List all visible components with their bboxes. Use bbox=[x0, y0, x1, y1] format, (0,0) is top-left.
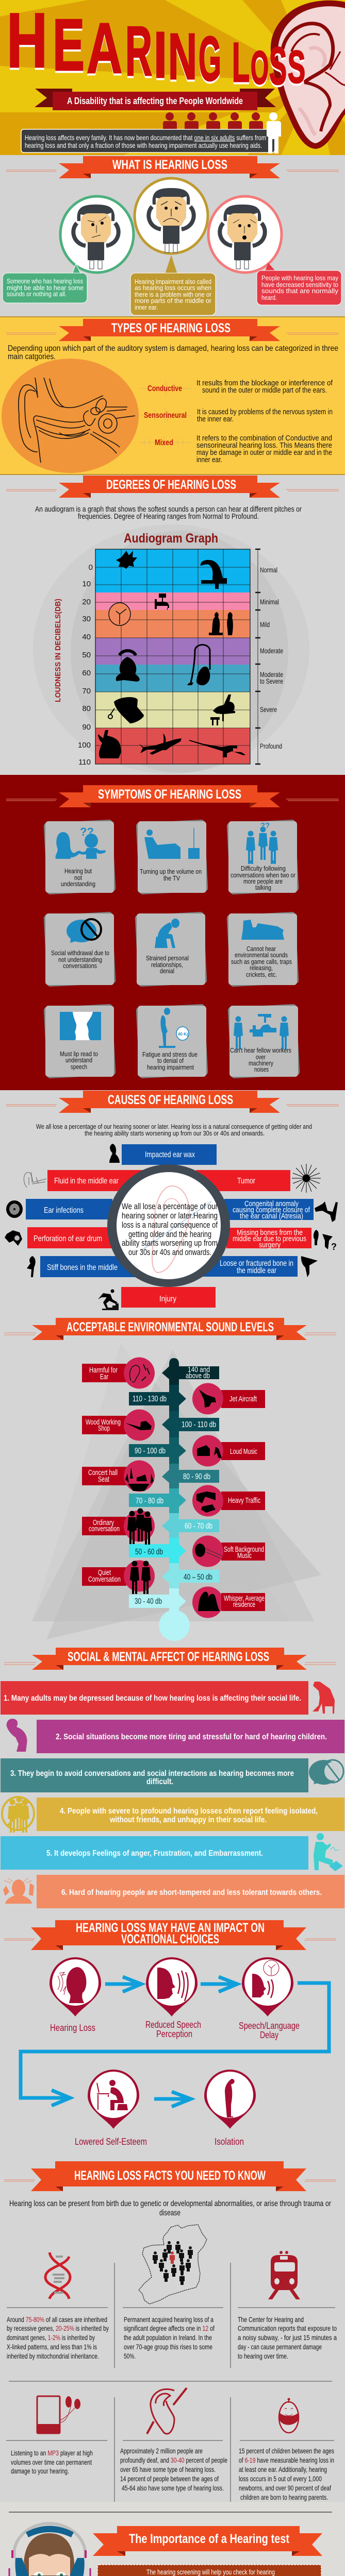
axis: decibel values: 60 bbox=[82, 669, 91, 677]
level tags: decibel ranges: 80 - 90 db bbox=[183, 1472, 210, 1481]
box: fluid: Fluid in the middle ear bbox=[54, 1177, 119, 1185]
icon: dna bbox=[45, 2252, 70, 2299]
callout: gold: Hearing Impairment also called bbox=[135, 278, 211, 285]
box: injury bbox=[121, 1287, 216, 1308]
chart: sound level spine bbox=[159, 1358, 190, 1641]
item: soft background music bbox=[192, 1535, 265, 1567]
label: mixed: Mixed bbox=[155, 438, 173, 447]
text: fact deaf: profoundly deaf, and 30-40 percent of people bbox=[120, 2456, 227, 2464]
title: S bbox=[269, 37, 287, 95]
subtitle ribbon: A Disability that is affecting the People Worldwide bbox=[67, 96, 243, 106]
card: social withdrawal: Social withdrawal due to bbox=[51, 949, 109, 957]
chart icons: sounds bbox=[98, 551, 245, 758]
card: fatigue and stress: to denial of bbox=[157, 1057, 184, 1064]
axis: decibel values: 110 bbox=[78, 758, 91, 767]
heading: symptoms of hearing loss bbox=[6, 785, 339, 807]
item: ordinary conversation: conversation bbox=[89, 1524, 120, 1533]
heading: facts bbox=[4, 2161, 336, 2191]
flow arrow 4 bbox=[154, 2092, 191, 2107]
flow step: speech language delay: Speech/Language bbox=[239, 2021, 300, 2031]
icon: no friends bbox=[2, 1797, 34, 1833]
scale: degree labels: Moderate bbox=[260, 647, 283, 655]
card: hearing but not understanding: ?? bbox=[80, 825, 94, 838]
box: missing bones: middle ear due to previous bbox=[233, 1234, 306, 1243]
flow step: reduced speech perception bbox=[145, 1957, 201, 2039]
subtitle ribbon bbox=[35, 89, 276, 110]
bar: point 4: without friends, and unhappy in their social life. bbox=[109, 1816, 267, 1824]
card: difficulty following conversations: Difficulty following bbox=[241, 865, 286, 872]
axis: decibel values: 50 bbox=[82, 651, 91, 659]
title: A bbox=[87, 9, 122, 88]
card: fatigue and stress: Fatigue and stress due bbox=[142, 1050, 198, 1058]
item: wood working shop: Shop bbox=[98, 1424, 110, 1433]
text: fact subway: The Center for Hearing and bbox=[238, 2315, 304, 2324]
item: harmful for ear bbox=[82, 1357, 155, 1389]
flow step: lowered self-esteem: Lowered Self-Esteem bbox=[75, 2137, 147, 2147]
callout: red: heard. bbox=[261, 294, 277, 301]
axis: decibel values: 10 bbox=[82, 580, 91, 588]
item: harmful for ear: Harmful for bbox=[89, 1366, 118, 1375]
icon: seated depressed person bbox=[313, 1682, 335, 1714]
flow arrow 1 bbox=[105, 1977, 141, 1992]
level tags: decibel ranges: 30 - 40 db bbox=[135, 1597, 162, 1606]
box: impacted ear wax: Impacted ear wax bbox=[145, 1150, 195, 1159]
card: difficulty following conversations: conversations when two or bbox=[231, 871, 296, 879]
box: loose bone: Loose or fractured bone in bbox=[220, 1259, 293, 1268]
card: fellow workers: machinery bbox=[249, 1059, 273, 1067]
icon: white person bbox=[267, 112, 281, 154]
text: degrees intro: frequencies. Degree of Hearing ranges from Normal to Profound. bbox=[78, 512, 259, 521]
axis: decibel values: 20 bbox=[82, 598, 91, 606]
panel: hearing screening: The hearing screening will help you check for hearing bbox=[146, 2568, 275, 2576]
text: fact ireland: significant degree affects one in 12 of bbox=[124, 2324, 215, 2332]
icon: ear anatomy bbox=[2, 359, 139, 473]
item: harmful for ear: Ear bbox=[100, 1372, 108, 1381]
card: difficulty following conversations: ?? bbox=[260, 821, 270, 830]
box: ear infections: Ear infections bbox=[44, 1206, 84, 1215]
divider bbox=[9, 2512, 332, 2513]
panel: header background bbox=[0, 0, 345, 155]
card: fatigue and stress: 40 Kg bbox=[178, 1032, 189, 1037]
level tags: decibel ranges: 100 - 110 db bbox=[182, 1420, 216, 1429]
text: causes intro bbox=[36, 1123, 312, 1137]
callout: green bbox=[3, 264, 87, 303]
box: missing bones bbox=[226, 1228, 311, 1249]
heading: social and mental affect bbox=[4, 1648, 336, 1670]
item: heavy traffic bbox=[192, 1485, 265, 1517]
card: social withdrawal: not understanding bbox=[58, 956, 102, 963]
callout: green: might be able to hear some bbox=[7, 284, 84, 292]
icon: train bbox=[268, 2251, 300, 2299]
heading: causes of hearing loss: CAUSES OF HEARING LOSS bbox=[108, 1093, 233, 1107]
box: stiff bones bbox=[40, 1256, 136, 1277]
card: turning up the volume: Turning up the volume on bbox=[140, 868, 202, 875]
text: types intro: main catgories. bbox=[8, 352, 56, 361]
callout: gold: there is a problem with one or bbox=[135, 291, 212, 298]
background triangles bbox=[32, 1343, 321, 1639]
heading: what is hearing loss: WHAT IS HEARING LOSS bbox=[112, 158, 227, 172]
text: fact inherited: Around 75-80% of all cases are inheritved bbox=[7, 2315, 107, 2324]
item: concert hall seat: Concert hall bbox=[88, 1468, 118, 1477]
card: strained relationships: relationships, bbox=[151, 961, 183, 969]
central circle: hearing sooner or later.Hearing bbox=[122, 1211, 218, 1221]
card: strained relationships: Strained personal bbox=[146, 954, 189, 962]
item: wood working shop: Wood Working bbox=[86, 1418, 121, 1427]
box: fluid bbox=[47, 1170, 143, 1191]
callout: gold bbox=[130, 255, 216, 315]
card: social withdrawal: conversations bbox=[63, 962, 97, 970]
icon: swaddled baby bbox=[279, 2398, 299, 2433]
heading: acceptable environmental sound levels bbox=[4, 1318, 336, 1340]
title: R bbox=[125, 12, 152, 90]
text: fact inherited: by recessive genes, 20-25% is inherited by bbox=[7, 2324, 109, 2332]
axis: decibel values: 30 bbox=[82, 615, 91, 623]
central circle bbox=[107, 1164, 230, 1287]
item: ordinary conversation bbox=[82, 1509, 155, 1545]
level tags: decibel ranges bbox=[129, 1365, 219, 1608]
item: concert hall seat bbox=[82, 1460, 155, 1492]
item: whisper bbox=[192, 1587, 265, 1618]
flow connector arrow bbox=[21, 1983, 329, 2106]
card: environmental sounds bbox=[226, 912, 299, 987]
text: sensorineural description bbox=[197, 408, 333, 423]
text: fact deaf: 14 percent of people between the ages of bbox=[120, 2475, 219, 2483]
scale: degree labels bbox=[255, 549, 283, 764]
card: hearing but not understanding bbox=[43, 820, 116, 894]
card: difficulty following conversations bbox=[226, 820, 299, 894]
axis: decibel values bbox=[78, 563, 93, 767]
callout: gold: as hearing loss occurs when bbox=[135, 284, 211, 292]
box: missing bones: Missing bones from the bbox=[237, 1228, 303, 1237]
panel: hearing screening bbox=[97, 2565, 321, 2576]
heading: types of hearing loss: TYPES OF HEARING LOSS bbox=[111, 321, 231, 335]
card: strained relationships bbox=[135, 912, 207, 987]
box: stiff bones: Stiff bones in the middle bbox=[47, 1263, 118, 1272]
text: fact deaf bbox=[120, 2447, 227, 2492]
card: fatigue and stress bbox=[136, 1004, 208, 1078]
box: loose bone: the middle ear bbox=[237, 1266, 277, 1275]
text: fact inherited: X-linked patterns, and less than 1% is bbox=[7, 2343, 97, 2351]
heading: vocational choices: HEARING LOSS MAY HAVE AN IMPACT ON bbox=[76, 1921, 265, 1935]
level tags: decibel ranges: 70 - 80 db bbox=[136, 1497, 163, 1505]
item: wood working shop bbox=[82, 1410, 155, 1440]
level tags: decibel ranges: 60 - 70 db bbox=[185, 1522, 212, 1531]
text: fact subway bbox=[238, 2315, 337, 2360]
text: facts intro bbox=[9, 2199, 332, 2217]
box: congenital anomaly: causing complete closure of bbox=[233, 1206, 310, 1214]
icon: ireland map bbox=[139, 2225, 207, 2304]
panel: surprised person bbox=[208, 196, 282, 273]
axis: decibel values: 80 bbox=[82, 704, 91, 713]
card: turning up the volume bbox=[136, 820, 208, 894]
text: causes intro: the hearing ability starts worsening up from our 30s or 40s and onwards. bbox=[85, 1129, 265, 1137]
item: heavy traffic: Heavy Traffic bbox=[228, 1496, 260, 1505]
card: hearing but not understanding: not bbox=[74, 874, 82, 882]
axis: decibel values: 100 bbox=[78, 741, 91, 750]
text: fact deaf: 45-64 also have some type of hearing loss. bbox=[122, 2484, 224, 2492]
card: hearing but not understanding: understanding bbox=[61, 880, 95, 888]
card: strained relationships: denial bbox=[160, 967, 174, 975]
icons: cause silhouettes bbox=[5, 1144, 338, 1310]
bar: point 6 bbox=[37, 1875, 344, 1908]
icon: kicking person bbox=[314, 1833, 343, 1871]
box: congenital anomaly: Congenital anomaly bbox=[244, 1199, 299, 1208]
card: hearing but not understanding: Hearing but bbox=[64, 867, 92, 875]
scale: degree labels: to Severe bbox=[260, 677, 283, 685]
text: fact ireland: over 70-age group this rises to some bbox=[124, 2343, 212, 2351]
icon: large ear bbox=[271, 1, 345, 149]
level tags: decibel ranges: 40 – 50 db bbox=[184, 1573, 212, 1582]
axis: decibel values: 70 bbox=[82, 687, 91, 696]
text: sensorineural description: the inner ear. bbox=[197, 415, 234, 423]
card: fellow workers: over bbox=[256, 1053, 266, 1061]
card: social withdrawal bbox=[43, 912, 116, 987]
title: N bbox=[168, 20, 197, 93]
text: fact inherited: inherited by mitochondrial inheritance. bbox=[7, 2352, 99, 2360]
callout: red: have decreased sensitivity to bbox=[261, 281, 338, 289]
callout: gold: more parts of the middle or bbox=[135, 297, 212, 304]
illustration: man with headphones bbox=[9, 2523, 90, 2576]
heading: degrees of hearing loss bbox=[6, 476, 339, 498]
card: fellow workers bbox=[227, 1004, 300, 1078]
heading: what is hearing loss bbox=[6, 156, 339, 178]
panel: sad person bbox=[135, 178, 208, 253]
label: sensorineural: Sensorineural bbox=[144, 411, 187, 420]
bar: point 3: 3. They begin to avoid conversations and social interactions as hearing becomes more bbox=[10, 1769, 294, 1778]
text: conductive description bbox=[196, 379, 333, 395]
box: injury: Injury bbox=[159, 1295, 176, 1303]
grid: fact dividers bbox=[6, 2263, 335, 2502]
heading: vocational choices bbox=[4, 1920, 336, 1950]
chart title: Audiogram Graph bbox=[124, 531, 218, 546]
panel: angry person bbox=[60, 196, 134, 273]
title: O bbox=[251, 42, 269, 94]
card: lip read: Must lip read to bbox=[60, 1050, 98, 1058]
title: I bbox=[154, 19, 167, 91]
item: jet aircraft bbox=[192, 1383, 265, 1415]
scale: degree labels: Normal bbox=[260, 566, 277, 574]
bar: point 1 bbox=[1, 1681, 308, 1715]
bar: point 2 bbox=[37, 1720, 344, 1753]
axis: decibel values: 90 bbox=[82, 723, 91, 732]
box: missing bones: surgery bbox=[259, 1241, 281, 1249]
box: ear infections bbox=[26, 1199, 112, 1219]
icons: cause silhouettes: ? bbox=[331, 1242, 337, 1252]
flow step: isolation: Isolation bbox=[215, 2137, 244, 2147]
icon: stressed head bbox=[3, 1878, 34, 1904]
heading: degrees of hearing loss: DEGREES OF HEARING LOSS bbox=[106, 478, 236, 492]
flow step: speech language delay: Delay bbox=[260, 2030, 278, 2040]
bar: point 3 bbox=[1, 1758, 308, 1792]
level tags: decibel ranges: above db bbox=[186, 1371, 210, 1380]
scale: degree labels: Severe bbox=[260, 705, 277, 714]
callout: red bbox=[257, 263, 341, 305]
callout: one in six adults: Hearing loss affects every family. It has now been documented that one in six adults suffers from bbox=[25, 133, 266, 142]
axis: decibel values: 0 bbox=[89, 563, 93, 572]
flow step: lowered self-esteem bbox=[75, 2070, 147, 2147]
title bbox=[7, 0, 305, 95]
heading: importance of a hearing test: The Importance of a Hearing test bbox=[129, 2532, 290, 2546]
text: fact deaf: Approximately 2 million people are bbox=[120, 2447, 203, 2455]
item: soft background music: Soft Background bbox=[224, 1545, 264, 1554]
text: fact inherited: dominant genes, 1-2% is inherited by bbox=[7, 2333, 95, 2342]
heading: symptoms of hearing loss: SYMPTOMS OF HEARING LOSS bbox=[98, 787, 241, 802]
flow step: hearing loss bbox=[50, 1957, 101, 2033]
title: L bbox=[232, 31, 250, 93]
title: S bbox=[288, 41, 305, 92]
icon: mp3 player bbox=[37, 2396, 80, 2434]
item: ordinary conversation: Ordinary bbox=[93, 1518, 114, 1527]
item: jet aircraft: Jet Aircraft bbox=[229, 1395, 257, 1403]
text: fact mp3 bbox=[11, 2449, 93, 2475]
axis: decibel values: 40 bbox=[82, 633, 91, 641]
callout: gold: inner ear. bbox=[135, 303, 158, 311]
level tags: decibel ranges: 140 and bbox=[188, 1365, 210, 1374]
item: soft background music: Music bbox=[237, 1551, 252, 1560]
text: fact mp3: volumes over time can permanent bbox=[11, 2458, 92, 2466]
card: difficulty following conversations: talking bbox=[255, 884, 271, 891]
icon: ear crossed bbox=[147, 2388, 187, 2434]
text: degrees intro bbox=[35, 505, 302, 521]
flow step: reduced speech perception: Reduced Speech bbox=[145, 2020, 201, 2030]
icon: one in six people bbox=[163, 112, 263, 131]
card: fellow workers: noises bbox=[254, 1065, 269, 1073]
item: quiet conversation: Quiet bbox=[98, 1568, 111, 1577]
scale: degree labels: Mild bbox=[260, 620, 270, 629]
central circle: getting older and the hearing bbox=[128, 1229, 211, 1239]
flow step: reduced speech perception: Perception bbox=[156, 2029, 192, 2039]
text: mixed description: inner ear. bbox=[196, 455, 222, 464]
scale: degree labels: Minimal bbox=[260, 598, 279, 606]
text: facts intro: disease bbox=[159, 2209, 180, 2217]
label: mixed bbox=[139, 436, 191, 449]
card: environmental sounds: environmental sounds bbox=[235, 951, 288, 959]
title: G bbox=[199, 24, 221, 94]
text: fact subway: to hearing over time. bbox=[238, 2352, 288, 2360]
central circle: our 30s or 40s and onwards. bbox=[128, 1247, 211, 1257]
level tags: decibel ranges: 50 - 60 db bbox=[135, 1548, 163, 1556]
card: environmental sounds: crickets, etc. bbox=[246, 971, 277, 978]
card: lip read bbox=[43, 1004, 116, 1078]
scale: degree labels: Profound bbox=[260, 742, 282, 750]
box: perforation: Perforation of ear drum bbox=[34, 1234, 102, 1243]
card: difficulty following conversations: more people are bbox=[243, 877, 283, 885]
card: turning up the volume: the TV bbox=[163, 874, 180, 882]
item: concert hall seat: Seat bbox=[98, 1475, 110, 1484]
background ellipses bbox=[33, 524, 309, 774]
card: fellow workers: Can't hear fellow workers bbox=[230, 1046, 291, 1054]
bar: point 5 bbox=[1, 1836, 308, 1870]
item: whisper: Whisper, Average bbox=[224, 1594, 265, 1603]
text: fact ireland: 50%. bbox=[124, 2352, 136, 2360]
callout: one in six adults bbox=[21, 129, 275, 152]
callout: green: Someone who has hearing loss bbox=[7, 277, 83, 285]
box: impacted ear wax bbox=[122, 1144, 217, 1165]
heading: causes of hearing loss bbox=[6, 1091, 339, 1113]
heading: importance of a hearing test bbox=[93, 2526, 322, 2556]
icon: crossed speech bubble bbox=[309, 1760, 343, 1785]
card: environmental sounds: such as game calls, traps bbox=[231, 958, 292, 965]
callout: green: sounds or nothing at all. bbox=[7, 290, 67, 298]
box: tumor bbox=[196, 1170, 290, 1191]
callout: red: sounds that are normally bbox=[261, 287, 339, 295]
box: loose bone bbox=[202, 1256, 298, 1277]
bar: point 5: 5. It develops Feelings of anger, Frustration, and Embarrassment. bbox=[46, 1849, 263, 1858]
heading: vocational choices: VOCATIONAL CHOICES bbox=[121, 1932, 219, 1946]
chart: audiogram bbox=[95, 549, 250, 764]
text: fact inherited bbox=[7, 2315, 109, 2360]
label: sensorineural bbox=[139, 408, 191, 422]
label: conductive: Conductive bbox=[147, 384, 182, 393]
axis label: LOUDNESS IN DECIBELS(DB) bbox=[54, 599, 62, 702]
icon: sad child bbox=[7, 1719, 27, 1752]
flow arrow 2 bbox=[201, 1977, 237, 1992]
flow step: speech language delay bbox=[239, 1957, 300, 2040]
bar: point 3: difficult. bbox=[146, 1777, 173, 1786]
level tags: decibel ranges: 90 - 100 db bbox=[135, 1447, 166, 1455]
box: perforation bbox=[27, 1227, 112, 1248]
flow step: hearing loss: Hearing Loss bbox=[50, 2023, 95, 2033]
item: loud music bbox=[192, 1435, 265, 1466]
card: environmental sounds: Cannot hear bbox=[247, 945, 276, 953]
item: quiet conversation bbox=[82, 1560, 155, 1594]
level tags: decibel ranges: 110 - 130 db bbox=[133, 1395, 167, 1403]
text: fact deaf: over 65 have some type of hearing loss. bbox=[120, 2465, 216, 2473]
text: fact ireland: the adult population in Ireland. In the bbox=[124, 2333, 212, 2342]
text: fact mp3: damage to your hearing. bbox=[11, 2467, 69, 2475]
label: conductive bbox=[139, 380, 191, 397]
text: types intro bbox=[8, 344, 338, 361]
bar: point 4 bbox=[37, 1798, 344, 1831]
card: lip read: speech bbox=[71, 1063, 87, 1071]
title: E bbox=[53, 4, 85, 86]
text: fact mp3: Listening to an MP3 player at high bbox=[11, 2449, 93, 2457]
item: quiet conversation: Conversation bbox=[88, 1575, 121, 1584]
callout: one in six adults: hearing loss and that only a fraction of those with hearing impairment actually use hearing aids. bbox=[25, 141, 262, 149]
text: mixed description bbox=[196, 434, 332, 464]
card: environmental sounds: releasing, bbox=[250, 964, 273, 972]
box: congenital anomaly bbox=[224, 1199, 314, 1221]
text: fact ireland: Permanent acquired hearing loss of a bbox=[124, 2315, 213, 2324]
box: tumor: Tumor bbox=[237, 1177, 256, 1185]
card: lip read: understand bbox=[65, 1056, 92, 1064]
central circle: loss is a natural consequence of bbox=[122, 1220, 218, 1230]
item: loud music: Loud Music bbox=[230, 1447, 257, 1456]
item: whisper: residence bbox=[233, 1600, 255, 1609]
text: fact ireland bbox=[124, 2315, 215, 2360]
central circle: ability starts worsening up from bbox=[122, 1238, 218, 1248]
card: fatigue and stress: hearing impairment bbox=[147, 1063, 194, 1071]
box: congenital anomaly: the ear canal (Atresia) bbox=[240, 1212, 303, 1221]
central circle: We all lose a percentage of our bbox=[122, 1201, 218, 1211]
text: fact children bbox=[239, 2447, 334, 2501]
scale: degree labels: Moderate bbox=[260, 670, 283, 679]
heading: types of hearing loss bbox=[6, 319, 339, 341]
flow step: isolation bbox=[204, 2070, 256, 2147]
